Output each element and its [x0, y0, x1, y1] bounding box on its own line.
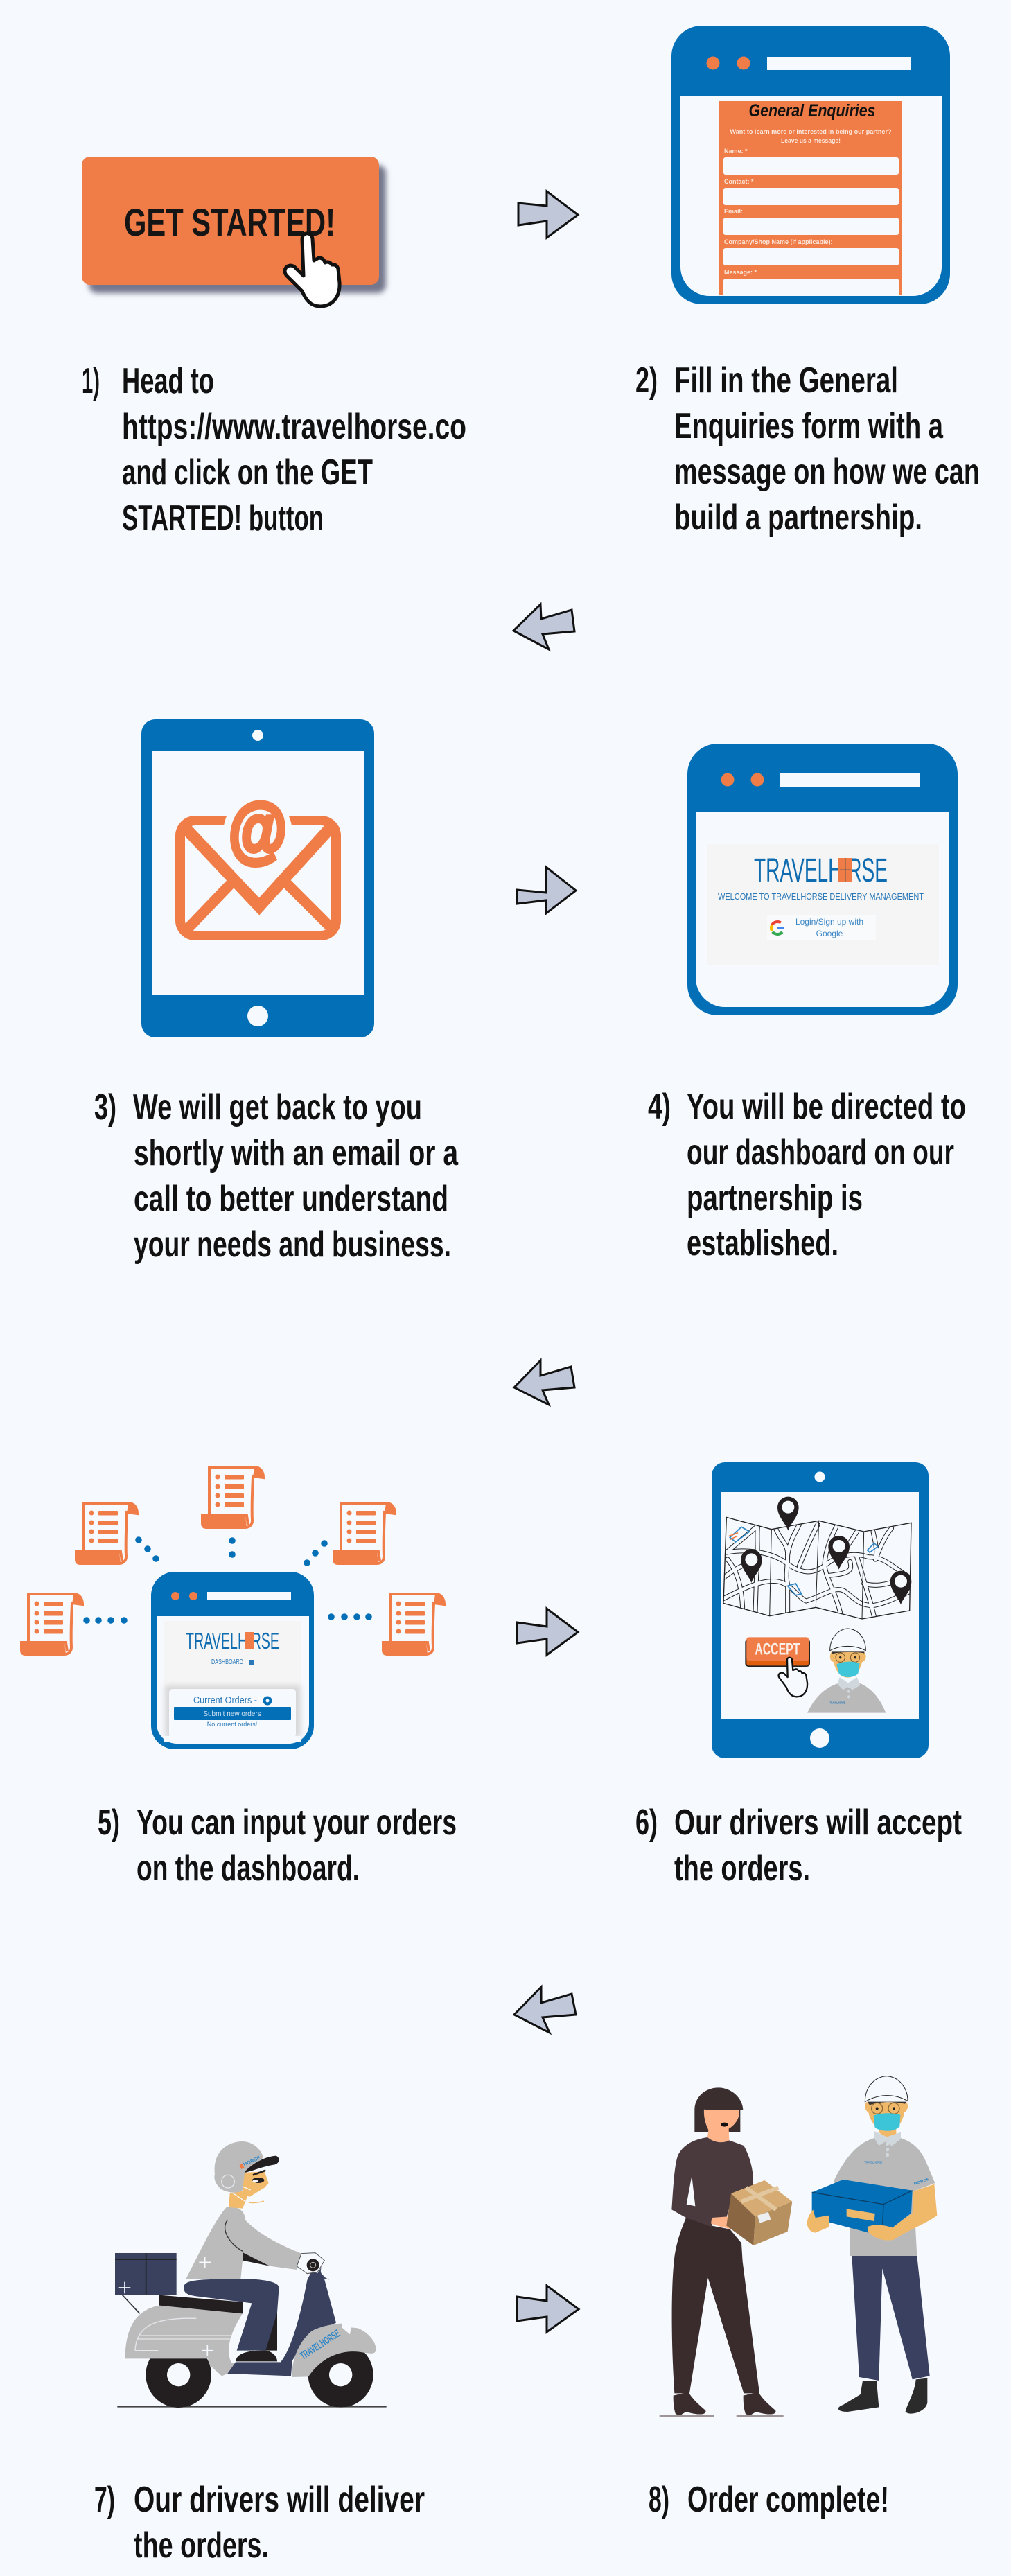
current orders card: No current orders!: [207, 1721, 257, 1728]
icon: order scroll far left: [21, 1594, 82, 1654]
text: step 2: [635, 360, 980, 538]
text: step 4: established.: [687, 1223, 838, 1263]
delivery man: [834, 2076, 937, 2414]
text: step 7: Our drivers will deliver: [134, 2480, 425, 2520]
icon: envelope with at sign: [180, 789, 336, 936]
panel: step 1 illustration, get started button: [82, 157, 386, 306]
google sign in button: Login/Sign up with: [795, 917, 863, 927]
hands on blue parcel: [807, 2209, 894, 2241]
delivery box: [115, 2253, 177, 2313]
text: step 2: 2): [635, 360, 658, 401]
travelhorse logo: TRAVELH RSE: [754, 852, 888, 889]
icon: order scroll top left: [76, 1503, 137, 1563]
delivery man: TRAVELHORSE: [864, 2160, 883, 2164]
google sign in button: Google: [816, 929, 843, 938]
enquiry form: Message: *: [724, 269, 757, 276]
browser viewport: [696, 812, 949, 1007]
tablet screen: [721, 1492, 919, 1719]
travelhorse logo: [754, 852, 888, 889]
enquiry form: Contact: *: [724, 178, 754, 185]
welcome line: WELCOME TO TRAVELHORSE DELIVERY MANAGEMENT: [718, 891, 924, 902]
cardboard parcel: [726, 2180, 792, 2245]
enquiry form: [719, 101, 902, 295]
google sign in button: [767, 915, 876, 940]
ground line: [117, 2405, 387, 2409]
panel: step 2 illustration, browser with enquiry form: [671, 26, 950, 304]
rider head and helmet: HORSE: [243, 2155, 261, 2168]
arrow: step 4 to step 5: [514, 1360, 574, 1405]
text: step 8: [649, 2480, 889, 2520]
rider torso and arm: [186, 2207, 324, 2279]
text: step 4: partnership is: [687, 1178, 863, 1218]
icon: map pins: [741, 1497, 911, 1604]
orange button: [82, 157, 379, 285]
rider legs and shoe: [184, 2279, 279, 2361]
enquiry form: Name: *: [724, 148, 748, 155]
tablet body: [712, 1462, 929, 1758]
icon: pointing hand cursor: [285, 234, 340, 306]
text: step 7: [94, 2480, 425, 2566]
text: step 2: Fill in the General: [674, 360, 898, 401]
customer woman: [660, 2087, 784, 2416]
panel: step 8 illustration, customer receiving parcel: [660, 2076, 937, 2416]
accept button: ACCEPT: [755, 1640, 800, 1659]
enquiry form: Company/Shop Name (If applicable):: [724, 238, 833, 245]
text: step 3: shortly with an email or a: [134, 1133, 459, 1173]
login panel: [707, 844, 939, 965]
dotted connectors: [83, 1536, 372, 1624]
text: step 3: [94, 1087, 459, 1265]
panel: step 6 illustration, tablet with map and driver: [712, 1462, 929, 1758]
text: step 4: 4): [648, 1087, 671, 1127]
icon: order scroll top right: [334, 1503, 395, 1563]
icon: order scroll far right: [383, 1594, 444, 1654]
text: step 3: call to better understand: [134, 1179, 448, 1219]
text: step 4: [648, 1087, 966, 1263]
text: step 5: You can input your orders: [137, 1803, 457, 1843]
browser frame: [671, 26, 950, 304]
current orders card: Submit new orders: [203, 1710, 261, 1718]
icon: hand cursor: [779, 1658, 807, 1697]
accept button: [745, 1637, 810, 1667]
arrow: step 7 to step 8: [517, 2286, 579, 2332]
button shadow: [89, 165, 386, 293]
enquiry form: Leave us a message!: [781, 137, 841, 144]
text: step 1: and click on the GET: [122, 453, 373, 493]
browser viewport: [157, 1616, 309, 1744]
scooter wheels: [146, 2342, 373, 2408]
text: step 3: 3): [94, 1087, 116, 1128]
tablet camera and home button: [810, 1472, 829, 1748]
text: step 7: 7): [94, 2480, 115, 2520]
text: step 6: the orders.: [674, 1848, 810, 1889]
browser dots and address bar: [171, 1592, 291, 1600]
dashboard panel: DASHBOARD: [211, 1658, 243, 1666]
panel: step 7 illustration, driver on scooter: [115, 2141, 387, 2408]
dashboard panel: [164, 1621, 301, 1742]
driver bust: [807, 1629, 886, 1713]
text: step 6: 6): [635, 1803, 658, 1843]
browser dots and address bar: [721, 773, 920, 787]
text: step 8: Order complete!: [687, 2480, 889, 2520]
arrow: step 1 to step 2: [518, 191, 578, 238]
current orders card: Current Orders -: [193, 1694, 257, 1706]
blue parcel: [812, 2180, 913, 2235]
map with routes: [723, 1517, 911, 1619]
browser frame: [687, 744, 958, 1015]
tablet camera and home button: [247, 730, 268, 1026]
text: step 6: [635, 1803, 962, 1889]
tablet body: [141, 719, 374, 1037]
arrow: step 6 to step 7: [514, 1987, 576, 2033]
driver bust: TRAVELHORSE: [830, 1701, 845, 1704]
arrow: step 5 to step 6: [517, 1609, 578, 1655]
current orders card: [169, 1689, 296, 1737]
button label: GET STARTED!: [124, 200, 335, 244]
enquiry form: Email:: [724, 208, 743, 215]
arrow: step 3 to step 4: [517, 867, 576, 913]
text: step 1: 1): [82, 361, 100, 401]
text: step 3: We will get back to you: [133, 1087, 422, 1128]
dashboard panel: TRAVELH RSE: [186, 1628, 279, 1654]
enquiry form: Want to learn more or interested in being our partner?: [730, 128, 891, 135]
text: step 7: the orders.: [134, 2525, 269, 2566]
text: step 2: build a partnership.: [674, 498, 922, 538]
text: step 1: Head to: [122, 361, 214, 401]
text: step 1: [82, 361, 466, 538]
browser dots and address bar: [707, 57, 911, 70]
text: step 5: on the dashboard.: [137, 1848, 360, 1889]
text: step 3: your needs and business.: [134, 1225, 451, 1265]
text: step 5: [98, 1803, 457, 1889]
text: step 8: 8): [649, 2480, 669, 2520]
text: step 1: https://www.travelhorse.co: [122, 407, 466, 447]
text: step 5: 5): [98, 1803, 120, 1843]
scooter body: [125, 2264, 376, 2377]
text: step 1: STARTED! button: [122, 498, 324, 538]
delivery man: HORSE: [913, 2177, 931, 2187]
browser frame: [151, 1572, 314, 1749]
enquiry form: General Enquiries: [748, 101, 876, 121]
icon: envelope with at sign: @: [229, 789, 287, 870]
rider head and helmet: [214, 2141, 279, 2209]
arrow: step 2 to step 3: [513, 604, 574, 649]
panel: step 4 illustration, browser with login: [687, 744, 958, 1015]
browser viewport: [680, 96, 942, 296]
icon: order scroll top: [202, 1467, 263, 1527]
panel: step 5 illustration, orders flowing to dashboard: [21, 1467, 444, 1749]
panel: step 3 illustration, tablet with email: [141, 719, 374, 1037]
tablet screen: [152, 751, 364, 995]
scooter body: TRAVELHORSE: [298, 2328, 342, 2362]
